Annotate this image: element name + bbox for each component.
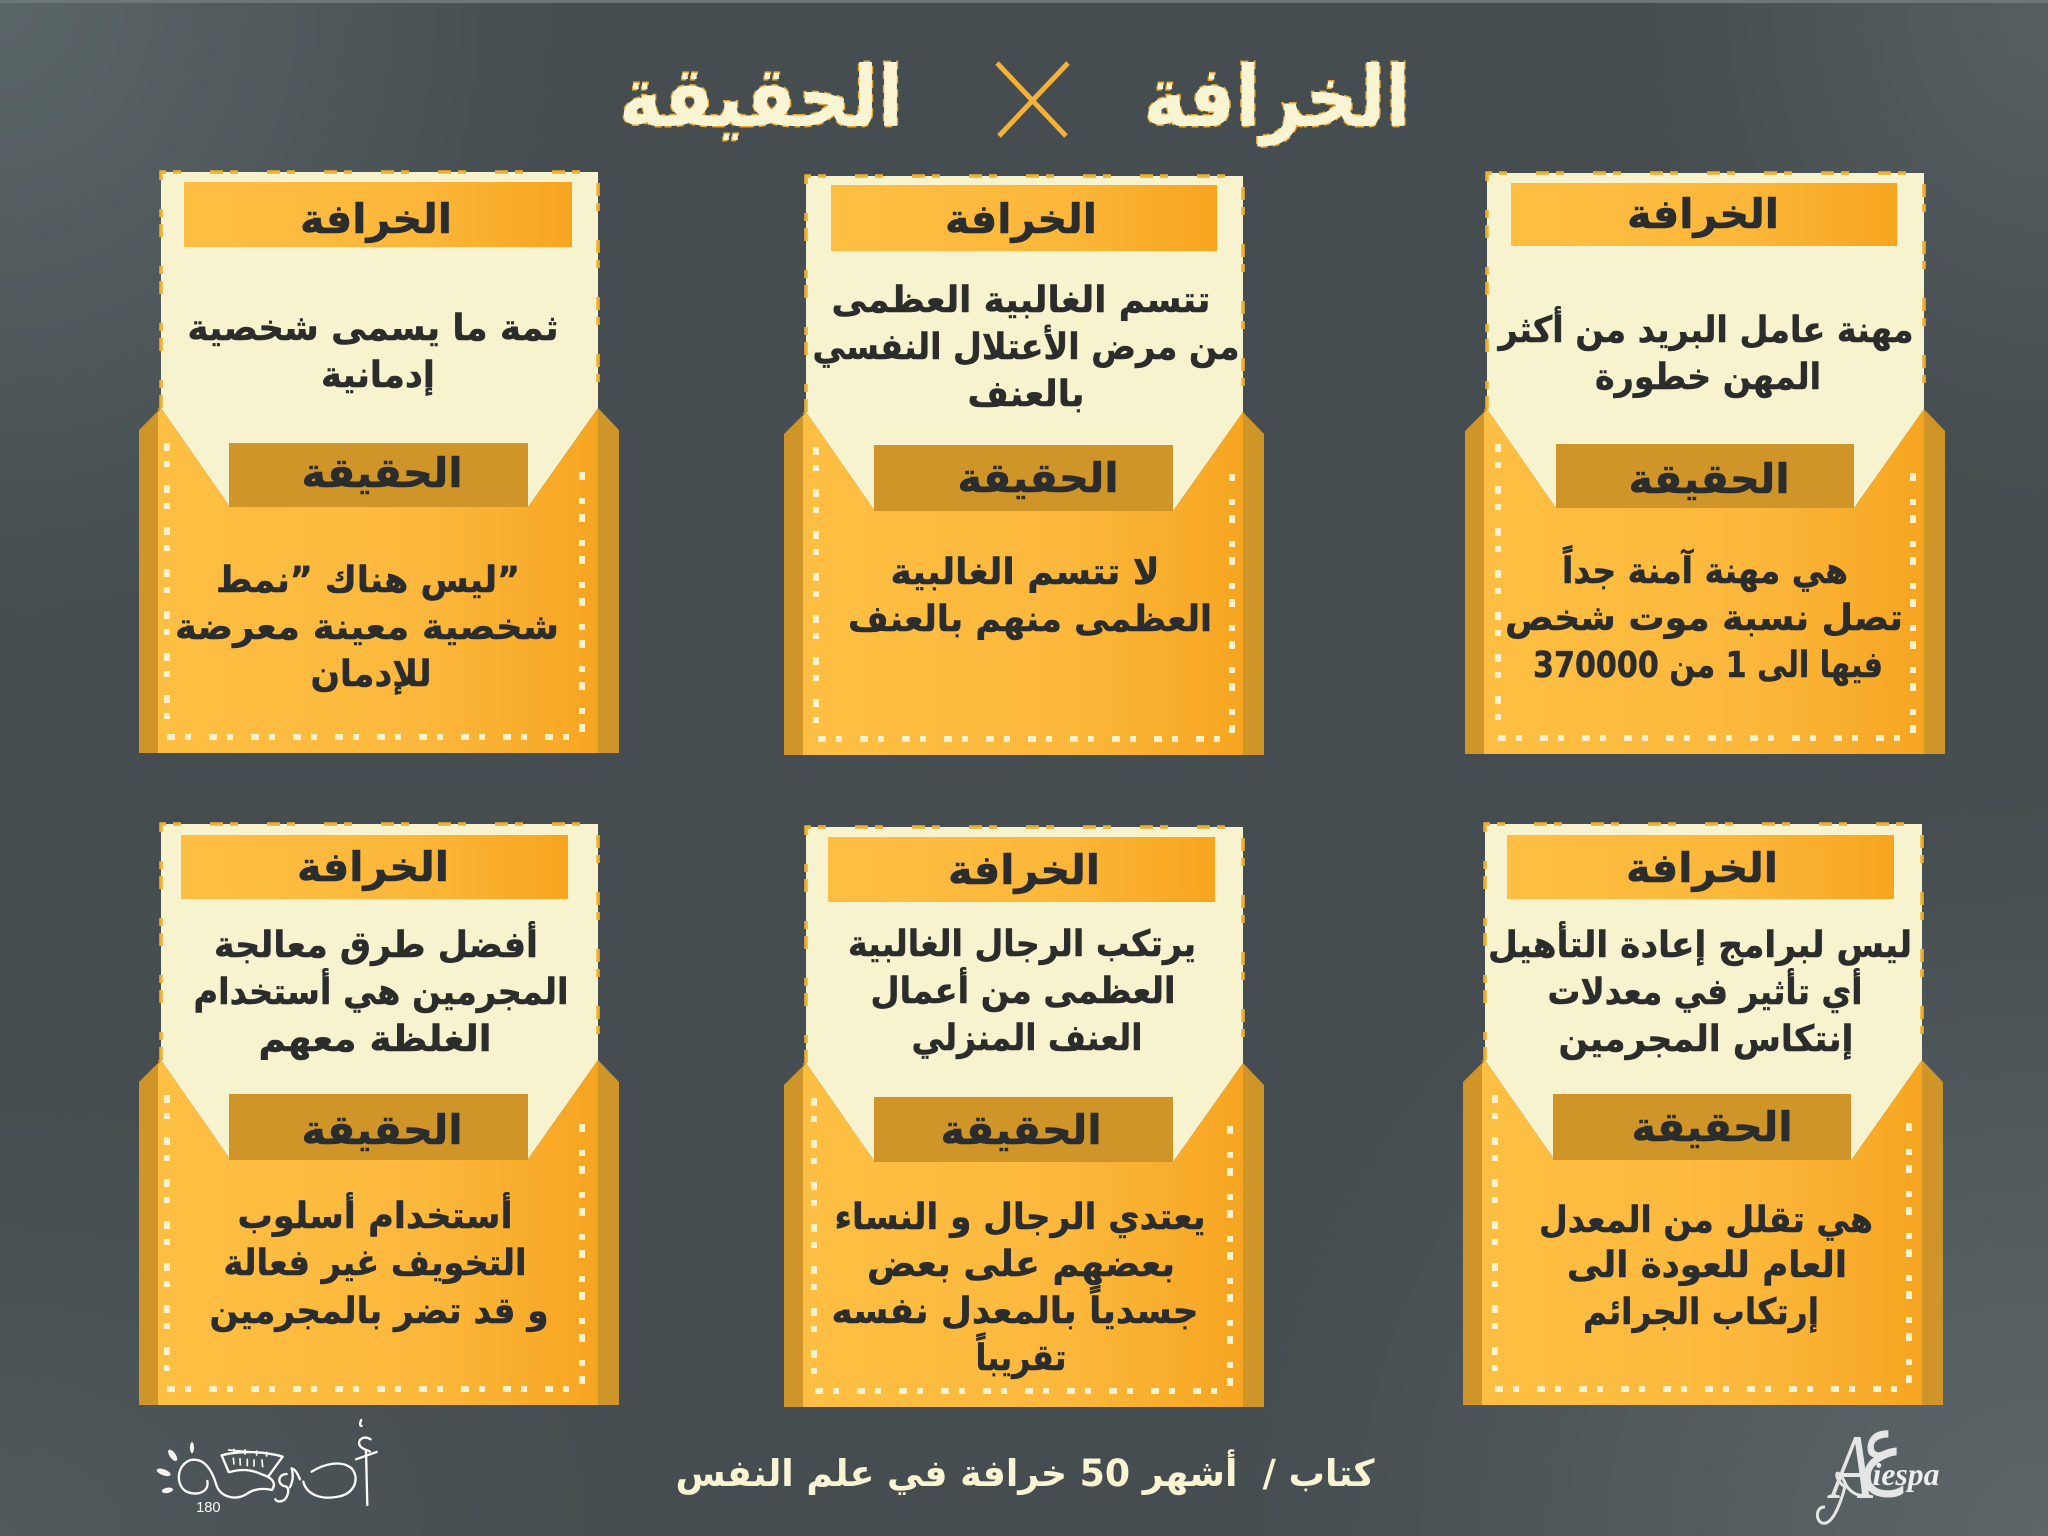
truth text: هي مهنة آمنة جداً bbox=[1562, 545, 1848, 592]
logo: left hand-drawn mark: 180 bbox=[196, 1500, 221, 1516]
truth text: للإدمان bbox=[310, 654, 432, 695]
truth text: فيها الى 1 من 370000 bbox=[1533, 645, 1883, 686]
myth heading: الخرافة bbox=[300, 195, 452, 243]
logo: Aiespa signature bbox=[1817, 1394, 1940, 1523]
myth text: مهنة عامل البريد من أكثر bbox=[1497, 306, 1914, 351]
truth text: و قد تضر بالمجرمين bbox=[210, 1291, 548, 1332]
truth heading: الحقيقة bbox=[1628, 455, 1790, 503]
truth text: شخصية معينة معرضة bbox=[175, 607, 559, 648]
myth text: إدمانية bbox=[321, 355, 435, 396]
myth text: تتسم الغالبية العظمى bbox=[832, 280, 1210, 321]
card: bottom right, rehabilitation bbox=[1463, 824, 1943, 1405]
truth text: تقريباً bbox=[976, 1332, 1066, 1379]
envelope bbox=[139, 824, 619, 1405]
myth text: الغلظة معهم bbox=[258, 1019, 492, 1060]
truth text bbox=[1505, 545, 1903, 686]
envelope bbox=[784, 176, 1264, 755]
envelope bbox=[139, 172, 619, 753]
truth text bbox=[210, 1192, 548, 1332]
myth text bbox=[188, 308, 558, 396]
myth text bbox=[1497, 306, 1914, 398]
myth heading: الخرافة bbox=[1626, 844, 1778, 892]
myth text bbox=[1488, 921, 1912, 1060]
myth text bbox=[194, 921, 568, 1060]
truth text: يعتدي الرجال و النساء bbox=[834, 1197, 1206, 1238]
truth text bbox=[832, 1197, 1206, 1379]
logo: Aiespa signature: iespa bbox=[1872, 1456, 1940, 1492]
truth text: هي تقلل من المعدل bbox=[1539, 1200, 1873, 1241]
envelope bbox=[1465, 173, 1945, 754]
truth heading: الحقيقة bbox=[302, 449, 462, 497]
card: top middle, mental illness bbox=[784, 176, 1264, 755]
truth heading: الحقيقة bbox=[940, 1106, 1102, 1154]
logo: left hand-drawn mark bbox=[156, 1420, 377, 1516]
myth text: المجرمين هي أستخدام bbox=[194, 968, 568, 1013]
truth text: تصل نسبة موت شخص bbox=[1505, 598, 1903, 639]
myth heading: الخرافة bbox=[1627, 190, 1779, 238]
truth heading: الحقيقة bbox=[1632, 1103, 1792, 1151]
myth text: أي تأثير في معدلات bbox=[1548, 968, 1862, 1013]
truth text bbox=[175, 560, 559, 695]
truth text: العظمى منهم بالعنف bbox=[848, 599, 1212, 640]
myth text: بالعنف bbox=[968, 374, 1084, 415]
truth text: إرتكاب الجرائم bbox=[1583, 1292, 1819, 1333]
myth text: إنتكاس المجرمين bbox=[1558, 1019, 1854, 1060]
myth text: العنف المنزلي bbox=[912, 1018, 1142, 1059]
myth text: يرتكب الرجال الغالبية bbox=[848, 924, 1196, 965]
logo: Aiespa signature: ع bbox=[1860, 1394, 1904, 1497]
myth heading: الخرافة bbox=[945, 195, 1097, 243]
truth text: التخويف غير فعالة bbox=[224, 1243, 526, 1284]
myth text: ليس لبرامج إعادة التأهيل bbox=[1488, 921, 1912, 966]
truth text: جسدياً بالمعدل نفسه bbox=[832, 1285, 1198, 1332]
title bbox=[619, 48, 1410, 147]
truth text: أستخدام أسلوب bbox=[238, 1192, 512, 1237]
truth text: بعضهم على بعض bbox=[867, 1244, 1175, 1285]
logo: Aiespa signature: A bbox=[1827, 1416, 1874, 1518]
myth text: أفضل طرق معالجة bbox=[214, 921, 538, 966]
envelope bbox=[784, 827, 1264, 1407]
card: bottom middle, domestic violence bbox=[784, 827, 1264, 1407]
icon: versus cross bbox=[997, 63, 1068, 136]
envelope bbox=[1463, 824, 1943, 1405]
truth heading: الحقيقة bbox=[302, 1106, 462, 1154]
myth text bbox=[812, 280, 1240, 415]
truth text: لا تتسم الغالبية bbox=[890, 552, 1160, 593]
myth text: العظمى من أعمال bbox=[870, 967, 1176, 1012]
myth text: ثمة ما يسمى شخصية bbox=[188, 308, 558, 349]
card: top left, addictive personality bbox=[139, 172, 619, 753]
card: top right, mail carrier bbox=[1465, 173, 1945, 754]
source line: كتاب / أشهر 50 خرافة في علم النفس bbox=[676, 1449, 1375, 1495]
truth text bbox=[1539, 1200, 1873, 1333]
myth heading: الخرافة bbox=[297, 843, 449, 891]
myth text: المهن خطورة bbox=[1595, 357, 1821, 398]
myth text bbox=[848, 924, 1196, 1059]
title: truth: الحقيقة bbox=[619, 48, 903, 146]
card: bottom left, treating criminals bbox=[139, 824, 619, 1405]
title: myth: الخرافة bbox=[1144, 48, 1410, 147]
truth heading: الحقيقة bbox=[958, 454, 1118, 502]
myth text: من مرض الأعتلال النفسي bbox=[812, 324, 1240, 368]
truth text bbox=[848, 552, 1212, 640]
truth text: العام للعودة الى bbox=[1567, 1245, 1847, 1286]
myth heading: الخرافة bbox=[948, 846, 1100, 894]
truth text: ”ليس هناك ”نمط bbox=[216, 560, 520, 601]
